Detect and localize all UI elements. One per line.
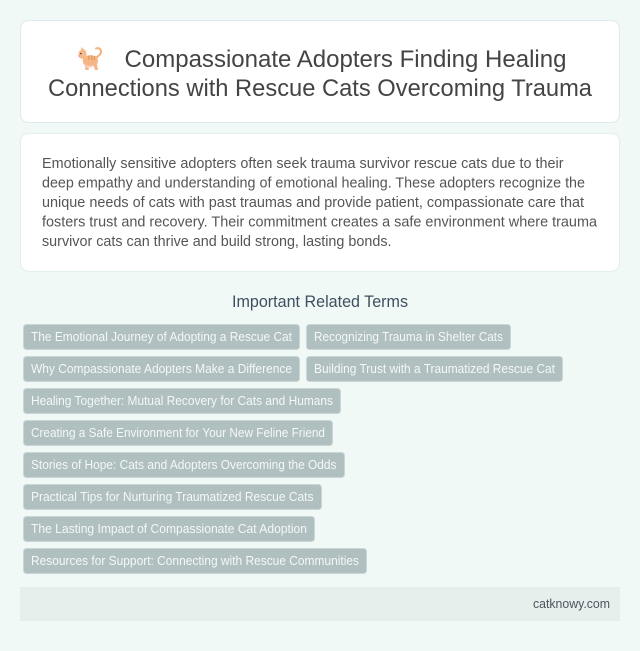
tag: practical tips bbox=[24, 484, 322, 510]
tag: resources for support: Resources for Support: Connecting with Rescue Communities bbox=[31, 553, 359, 568]
summary paragraph: Emotionally sensitive adopters often seek trauma survivor rescue cats due to their bbox=[42, 155, 564, 172]
tag: emotional journey: The Emotional Journey of Adopting a Rescue Cat bbox=[31, 329, 292, 344]
tag: lasting impact bbox=[24, 516, 314, 542]
footer bar bbox=[20, 587, 620, 621]
tag: healing together: Healing Together: Mutual Recovery for Cats and Humans bbox=[31, 393, 333, 408]
tag: building trust bbox=[306, 356, 562, 382]
tag: why compassionate adopters bbox=[24, 356, 300, 382]
title: Connections with Rescue Cats Overcoming Trauma bbox=[48, 75, 593, 102]
title: Compassionate Adopters Finding Healing bbox=[124, 46, 566, 73]
heading: important related terms: Important Related Terms bbox=[232, 292, 408, 311]
panel: title card bbox=[20, 20, 620, 122]
summary paragraph bbox=[42, 155, 598, 250]
tag: stories of hope: Stories of Hope: Cats and Adopters Overcoming the Odds bbox=[31, 457, 336, 472]
panel: summary card bbox=[20, 134, 620, 272]
panel: related terms tags bbox=[24, 324, 562, 574]
tag: resources for support bbox=[24, 548, 366, 574]
tag: recognizing trauma bbox=[306, 324, 510, 350]
tag: safe environment bbox=[24, 420, 332, 446]
tag: why compassionate adopters: Why Compassionate Adopters Make a Difference bbox=[31, 361, 292, 376]
tag: recognizing trauma: Recognizing Trauma in Shelter Cats bbox=[314, 329, 503, 344]
tag: emotional journey bbox=[24, 324, 300, 350]
tag: lasting impact: The Lasting Impact of Compassionate Cat Adoption bbox=[31, 521, 307, 536]
summary paragraph: survivor cats can thrive and build strong, lasting bonds. bbox=[42, 233, 392, 250]
tag: stories of hope bbox=[24, 452, 344, 478]
tag: safe environment: Creating a Safe Environment for Your New Feline Friend bbox=[31, 425, 325, 440]
summary paragraph: deep empathy and understanding of emotional healing. These adopters recognize the bbox=[42, 174, 585, 192]
title bbox=[48, 46, 593, 102]
summary paragraph: fosters trust and recovery. Their commitment creates a safe environment where trauma bbox=[42, 214, 598, 230]
icon: orange cat bbox=[78, 47, 101, 70]
tag: building trust: Building Trust with a Traumatized Rescue Cat bbox=[314, 361, 555, 376]
tag: healing together bbox=[24, 388, 340, 414]
tag: practical tips: Practical Tips for Nurturing Traumatized Rescue Cats bbox=[31, 489, 314, 504]
footer site name: catknowy.com bbox=[533, 596, 610, 611]
summary paragraph: unique needs of cats with past traumas and provide patient, compassionate care that bbox=[42, 194, 585, 211]
